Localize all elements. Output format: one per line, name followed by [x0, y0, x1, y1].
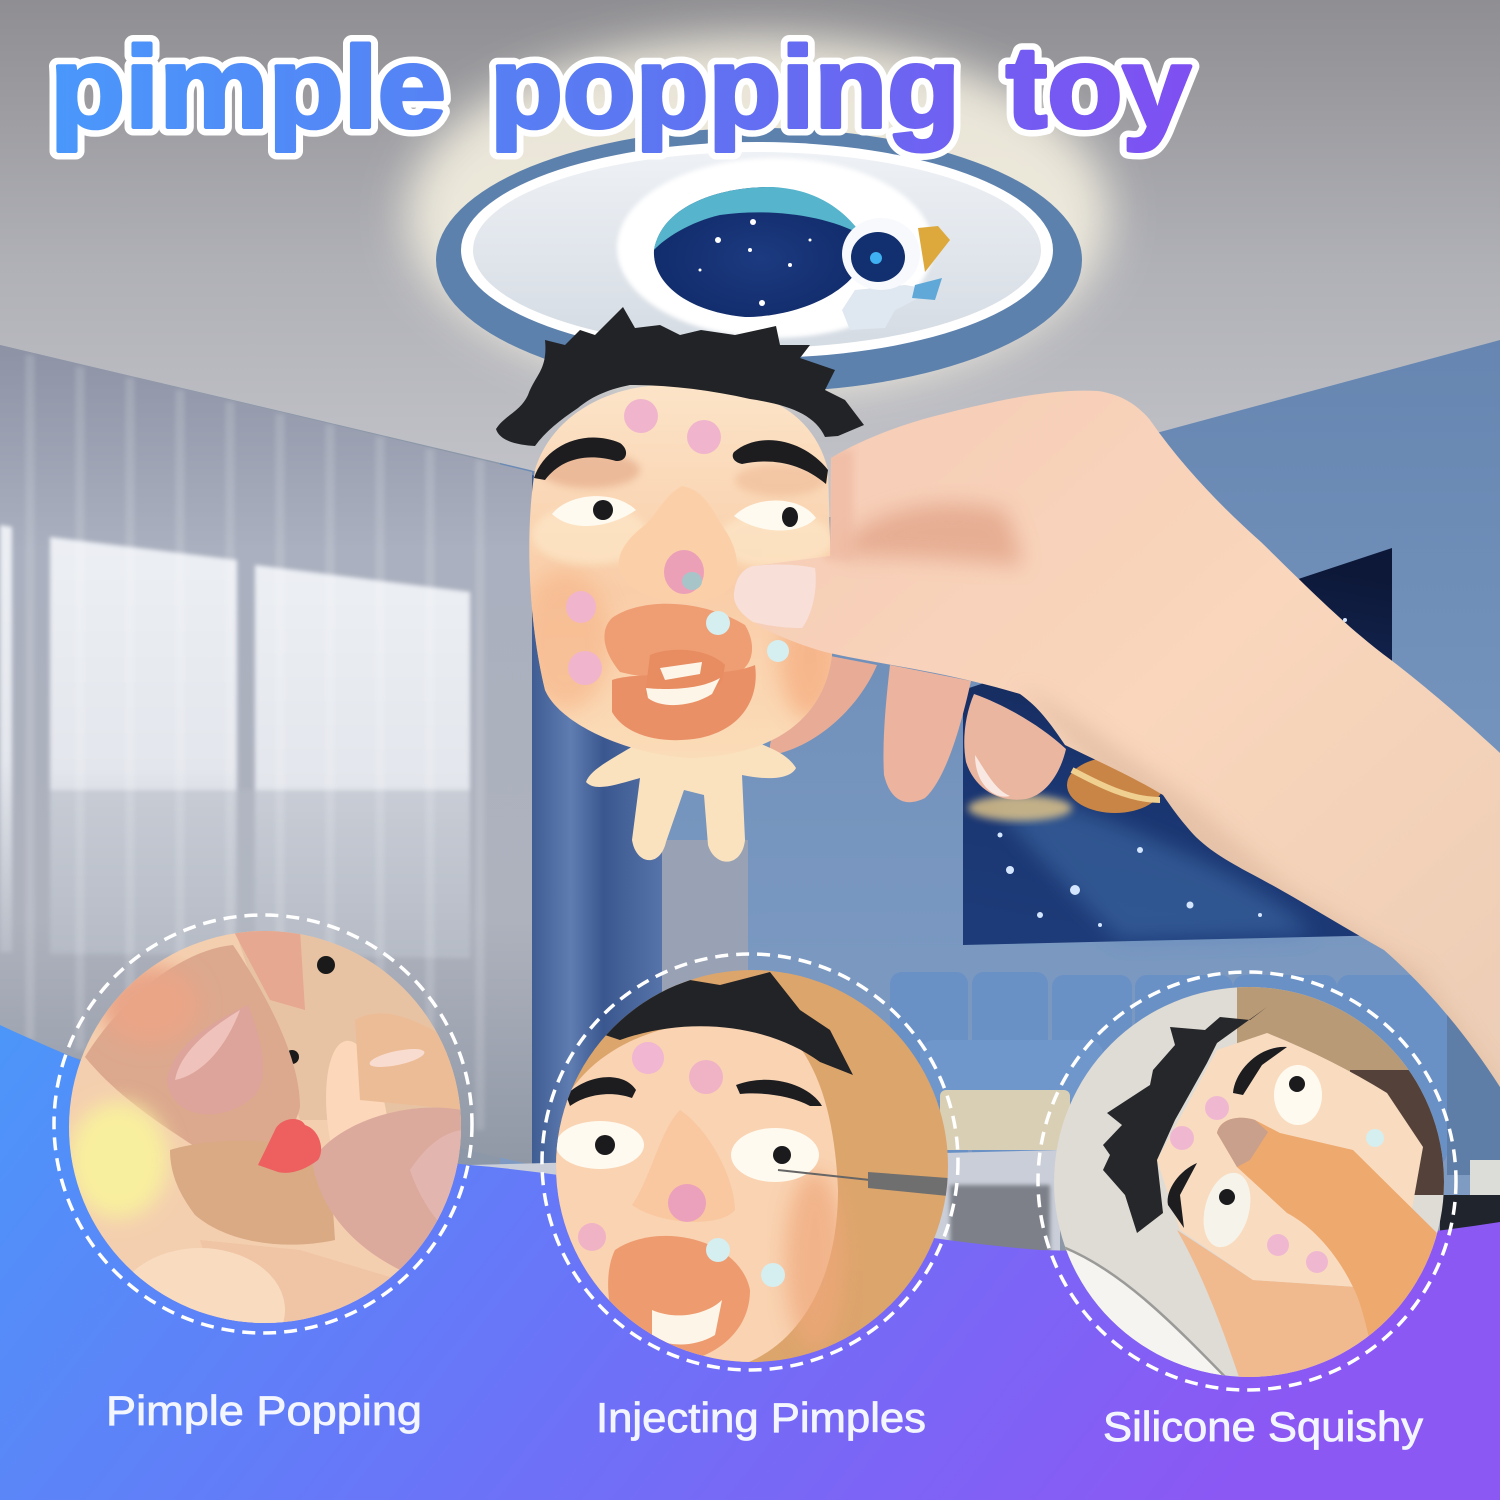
poster nebula	[990, 798, 1310, 940]
nose	[619, 486, 737, 602]
right finger	[312, 1107, 462, 1270]
lamp starry dome	[654, 187, 866, 317]
brows	[1233, 1047, 1287, 1095]
hair	[1103, 1007, 1267, 1233]
label: injecting pimples: Injecting Pimples	[596, 1394, 926, 1441]
upper lip	[604, 604, 752, 679]
toy on hand	[496, 307, 1500, 1120]
red pimple	[258, 1119, 321, 1173]
circle: injecting pimples	[542, 954, 958, 1370]
head	[529, 384, 833, 758]
plastic strip	[1066, 1248, 1224, 1376]
ceiling lamp	[406, 37, 1110, 393]
lower ball	[133, 1248, 285, 1323]
hand shading	[825, 450, 1500, 1120]
window panes	[0, 525, 470, 958]
nail	[167, 1005, 263, 1114]
dashed ring	[1038, 972, 1456, 1390]
eyes	[552, 496, 636, 526]
thumb	[1217, 1118, 1437, 1343]
face shading	[520, 452, 840, 720]
circle: pimple popping	[54, 915, 472, 1372]
upper teeth	[660, 662, 702, 680]
lamp dome teal highlight	[654, 187, 862, 250]
title: popping	[490, 24, 960, 152]
legs and arms	[586, 735, 796, 862]
pimples	[1205, 1096, 1229, 1120]
fingers behind toy	[770, 655, 1066, 802]
middle finger	[170, 1141, 335, 1245]
ceiling	[0, 0, 1500, 535]
title	[50, 24, 1191, 152]
dashed ring	[54, 915, 472, 1333]
right wall	[500, 300, 1500, 1200]
lower teeth	[646, 678, 720, 705]
toy face behind	[238, 934, 461, 1120]
title: toy	[1006, 24, 1191, 152]
upper finger	[85, 945, 300, 1154]
toy body	[496, 307, 864, 862]
label: silicone squishy: Silicone Squishy	[1103, 1403, 1423, 1450]
circle: silicone squishy	[1038, 972, 1456, 1390]
eyes	[1274, 1065, 1322, 1125]
planet	[968, 757, 1163, 821]
sheer curtain folds	[30, 355, 480, 1130]
title: toy	[1006, 24, 1191, 152]
lamp grey band	[473, 152, 1041, 348]
lamp glow halo	[406, 37, 1110, 393]
lamp inner bright ring	[617, 158, 933, 338]
lower lip	[612, 665, 756, 740]
title: pimple	[50, 24, 446, 152]
lower hand	[1177, 1230, 1370, 1385]
pimples	[566, 399, 721, 685]
hair	[496, 307, 864, 446]
astronaut	[842, 218, 950, 330]
mouth inner	[645, 650, 725, 703]
lamp white edge	[461, 142, 1053, 358]
yellow blob	[68, 1102, 168, 1218]
hand	[734, 391, 1500, 1087]
pillows and bed	[920, 1040, 1103, 1100]
fingernail	[734, 565, 816, 628]
headboard	[890, 972, 1447, 1165]
title: pimple	[50, 24, 446, 152]
lower skin	[200, 1240, 391, 1323]
head	[1157, 1033, 1423, 1287]
dashed ring	[542, 954, 958, 1370]
curtain wall	[0, 345, 532, 1165]
lamp outer blue ring	[436, 128, 1082, 392]
syringe	[778, 1170, 870, 1180]
blue drapes	[532, 475, 662, 1170]
space poster	[963, 548, 1392, 945]
title: popping	[490, 24, 960, 152]
label: pimple popping: Pimple Popping	[106, 1387, 422, 1434]
bottom gradient band	[0, 1025, 1500, 1500]
eyebrows	[534, 438, 626, 480]
